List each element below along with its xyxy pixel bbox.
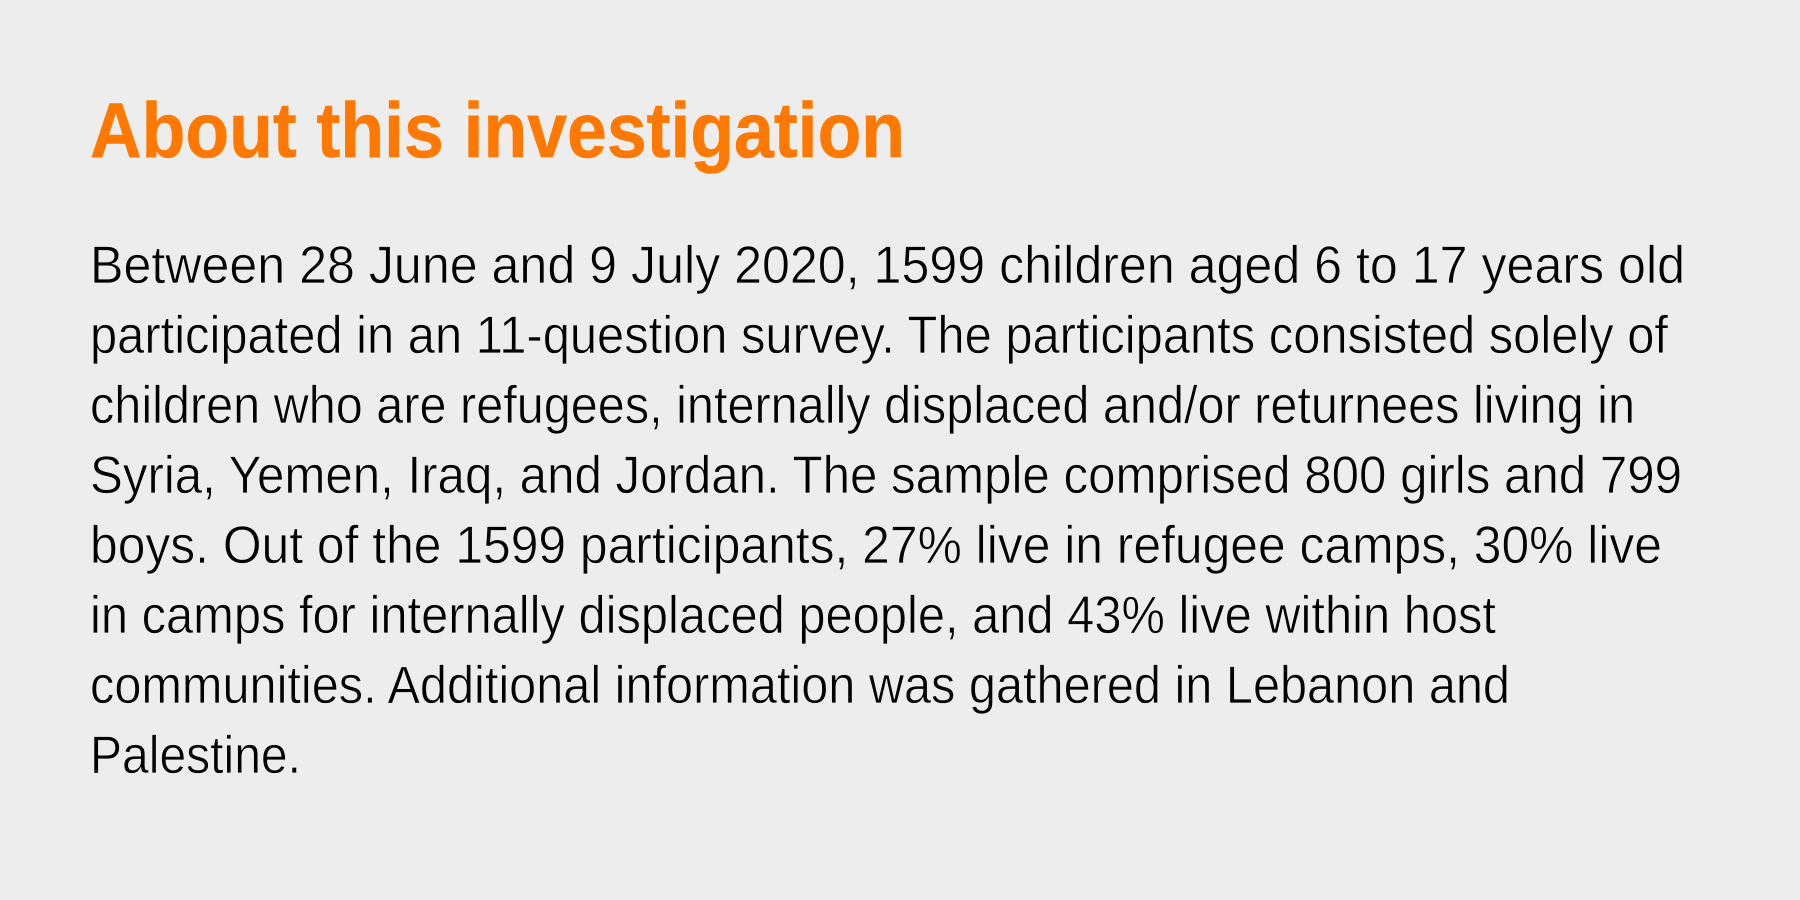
body text block: Between 28 June and 9 July 2020, 1599 children aged 6 to 17 years old [90,236,1685,295]
body text block: communities. Additional information was gathered in Lebanon and [90,656,1510,715]
body text block: children who are refugees, internally displaced and/or returnees living in [90,376,1635,435]
title: About this investigation [90,86,905,174]
body text block: participated in an 11-question survey. The participants consisted solely of [90,306,1668,365]
body text block [90,236,1685,785]
body text block: Palestine. [90,726,301,785]
body text block: in camps for internally displaced people, and 43% live within host [90,586,1496,645]
body text block: Syria, Yemen, Iraq, and Jordan. The sample comprised 800 girls and 799 [90,446,1682,505]
body text block: boys. Out of the 1599 participants, 27% live in refugee camps, 30% live [90,516,1662,575]
